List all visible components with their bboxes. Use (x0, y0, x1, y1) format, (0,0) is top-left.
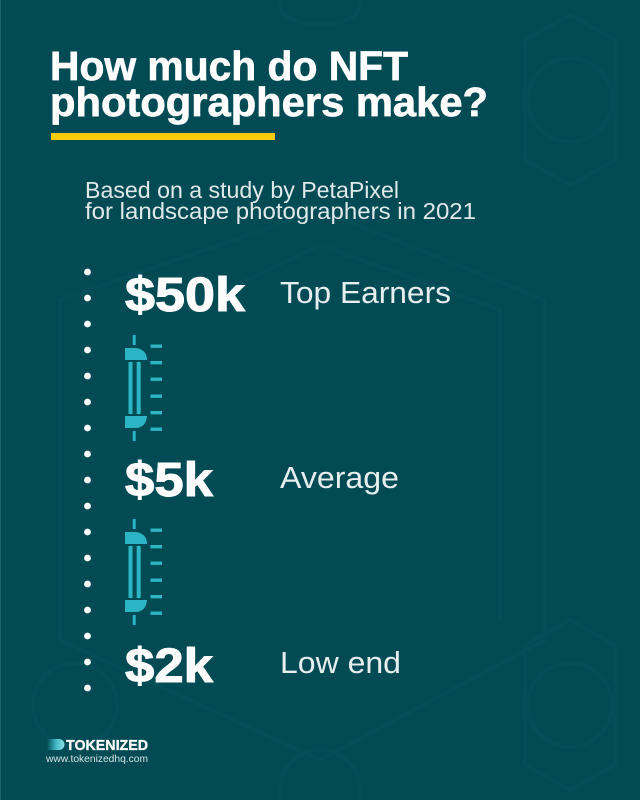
footer logo: TOKENIZED (66, 738, 148, 754)
value: top earners: $50k (125, 269, 245, 322)
subtitle: Based on a study by PetaPixel (85, 177, 399, 203)
value: low end: $2k (125, 640, 213, 693)
title (50, 43, 488, 125)
label: top earners: Top Earners (280, 276, 451, 310)
subtitle: for landscape photographers in 2021 (85, 198, 476, 224)
subtitle (85, 177, 476, 224)
footer url: www.tokenizedhq.com (45, 753, 148, 765)
title: How much do NFT (50, 43, 408, 89)
label: low end: Low end (280, 646, 401, 680)
icon: connector one (125, 335, 162, 441)
icon: connector two (125, 519, 162, 625)
title: photographers make? (50, 79, 488, 125)
dotted vertical line (84, 269, 91, 691)
title underline (51, 133, 275, 140)
value: average: $5k (125, 454, 213, 507)
label: average: Average (280, 461, 399, 495)
